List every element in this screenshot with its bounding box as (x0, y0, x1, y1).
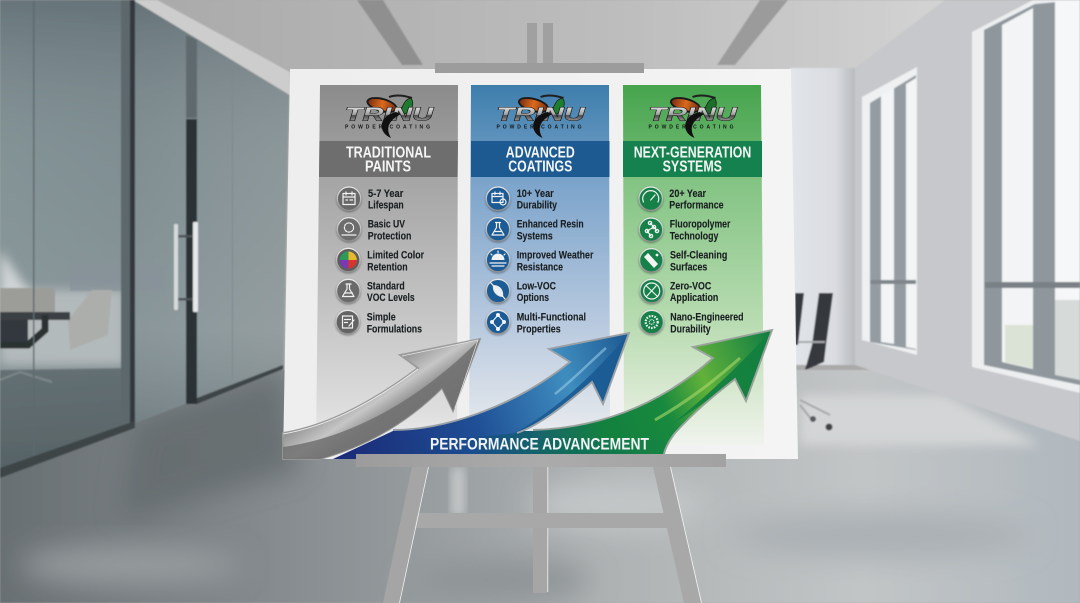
item: multi-functional properties: Multi-Functional (517, 312, 586, 324)
item: 20+ year performance: 20+ Year (669, 188, 707, 200)
logo: next-generation: POWDER COATING (648, 124, 734, 130)
door handles (174, 222, 198, 312)
easel top posts (527, 23, 553, 64)
panel: next-generation systems (623, 85, 764, 445)
performance banner text: PERFORMANCE ADVANCEMENT (430, 434, 650, 453)
window near (972, 0, 1080, 393)
window far (862, 67, 917, 355)
arrow: blue (393, 333, 629, 440)
item: 10+ year durability (486, 187, 558, 211)
ceiling (130, 0, 1080, 90)
item: self-cleaning surfaces: Surfaces (670, 261, 707, 273)
easel right leg (653, 467, 701, 603)
item: 5-7 year lifespan (337, 187, 404, 211)
logo: traditional: POWDER COATING (345, 124, 430, 130)
item: nano-engineered durability (640, 310, 744, 335)
item: simple formulations: Formulations (367, 323, 422, 335)
right wall (855, 0, 1080, 441)
item: nano-engineered durability: Nano-Engineered (670, 312, 744, 324)
item: 10+ year durability: Durability (517, 199, 558, 211)
logo: traditional: TRINU (345, 104, 435, 124)
item: low-voc options (486, 279, 556, 304)
item: improved weather resistance (486, 248, 594, 273)
item: fluoropolymer technology: Fluoropolymer (670, 219, 731, 231)
panel: advanced coatings (469, 85, 610, 445)
easel left leg (383, 467, 428, 603)
item: basic uv protection: Basic UV (368, 219, 406, 231)
header: advanced coatings: COATINGS (508, 159, 572, 176)
logo: next-generation (648, 94, 738, 138)
easel top clamp bar (435, 63, 644, 73)
item: zero-voc application: Application (670, 292, 719, 304)
item: basic uv protection (337, 218, 412, 242)
item: 10+ year durability: 10+ Year (517, 188, 554, 200)
header: next-generation systems: SYSTEMS (663, 159, 722, 176)
item: enhanced resin systems: Enhanced Resin (517, 219, 584, 231)
white beam (133, 0, 290, 95)
logo: advanced: TRINU (496, 104, 586, 124)
arrow: gray (283, 339, 480, 459)
reflected meeting room (0, 250, 165, 470)
item: limited color retention: Retention (367, 261, 408, 273)
easel shelf (356, 454, 726, 467)
ceiling lights (357, 0, 788, 65)
item: zero-voc application (640, 279, 719, 304)
item: standard voc levels: VOC Levels (367, 292, 415, 304)
back wall (790, 68, 855, 365)
item: fluoropolymer technology (639, 218, 731, 242)
header: next-generation systems (623, 141, 762, 177)
item: 20+ year performance: Performance (669, 199, 724, 211)
floor reflections (20, 367, 1040, 602)
item: multi-functional properties (486, 310, 586, 335)
item: 5-7 year lifespan: Lifespan (368, 199, 404, 211)
item: basic uv protection: Protection (368, 230, 412, 242)
item: fluoropolymer technology: Technology (670, 230, 719, 242)
item: standard voc levels: Standard (367, 281, 405, 293)
header: next-generation systems: NEXT-GENERATION (634, 144, 751, 161)
office chair (795, 293, 833, 430)
logo: next-generation: TRINU (648, 104, 738, 124)
logo: advanced: POWDER COATING (496, 124, 582, 130)
floor (0, 370, 1080, 603)
glass wall (0, 0, 289, 470)
item: enhanced resin systems: Systems (517, 230, 553, 242)
arrow: green (533, 330, 772, 459)
item: improved weather resistance: Resistance (517, 261, 563, 273)
header: advanced coatings (471, 141, 610, 177)
poster board (283, 69, 798, 459)
item: multi-functional properties: Properties (517, 323, 561, 335)
item: limited color retention (337, 248, 425, 273)
easel (356, 454, 726, 603)
performance banner fill (333, 431, 672, 459)
panel: traditional paints (316, 85, 458, 445)
item: nano-engineered durability: Durability (670, 323, 711, 335)
item: zero-voc application: Zero-VOC (670, 281, 711, 293)
item: low-voc options: Low-VOC (517, 281, 556, 293)
item: self-cleaning surfaces (640, 249, 727, 273)
header: traditional paints (319, 141, 458, 177)
item: enhanced resin systems (486, 218, 584, 242)
header: traditional paints: TRADITIONAL (346, 144, 431, 161)
item: 20+ year performance (639, 187, 724, 211)
item: simple formulations (336, 310, 422, 335)
item: self-cleaning surfaces: Self-Cleaning (670, 250, 727, 262)
item: 5-7 year lifespan: 5-7 Year (368, 188, 404, 200)
glass wall frames (0, 0, 283, 478)
item: low-voc options: Options (517, 292, 549, 304)
logo: traditional (345, 94, 435, 138)
easel centre post (533, 467, 548, 593)
logo: advanced (496, 94, 586, 138)
item: limited color retention: Limited Color (367, 250, 425, 262)
item: standard voc levels (337, 279, 415, 304)
item: simple formulations: Simple (367, 312, 396, 324)
header: traditional paints: PAINTS (365, 159, 411, 176)
item: improved weather resistance: Improved Weather (517, 250, 594, 262)
easel crossbar (414, 513, 668, 528)
header: advanced coatings: ADVANCED (506, 144, 575, 161)
